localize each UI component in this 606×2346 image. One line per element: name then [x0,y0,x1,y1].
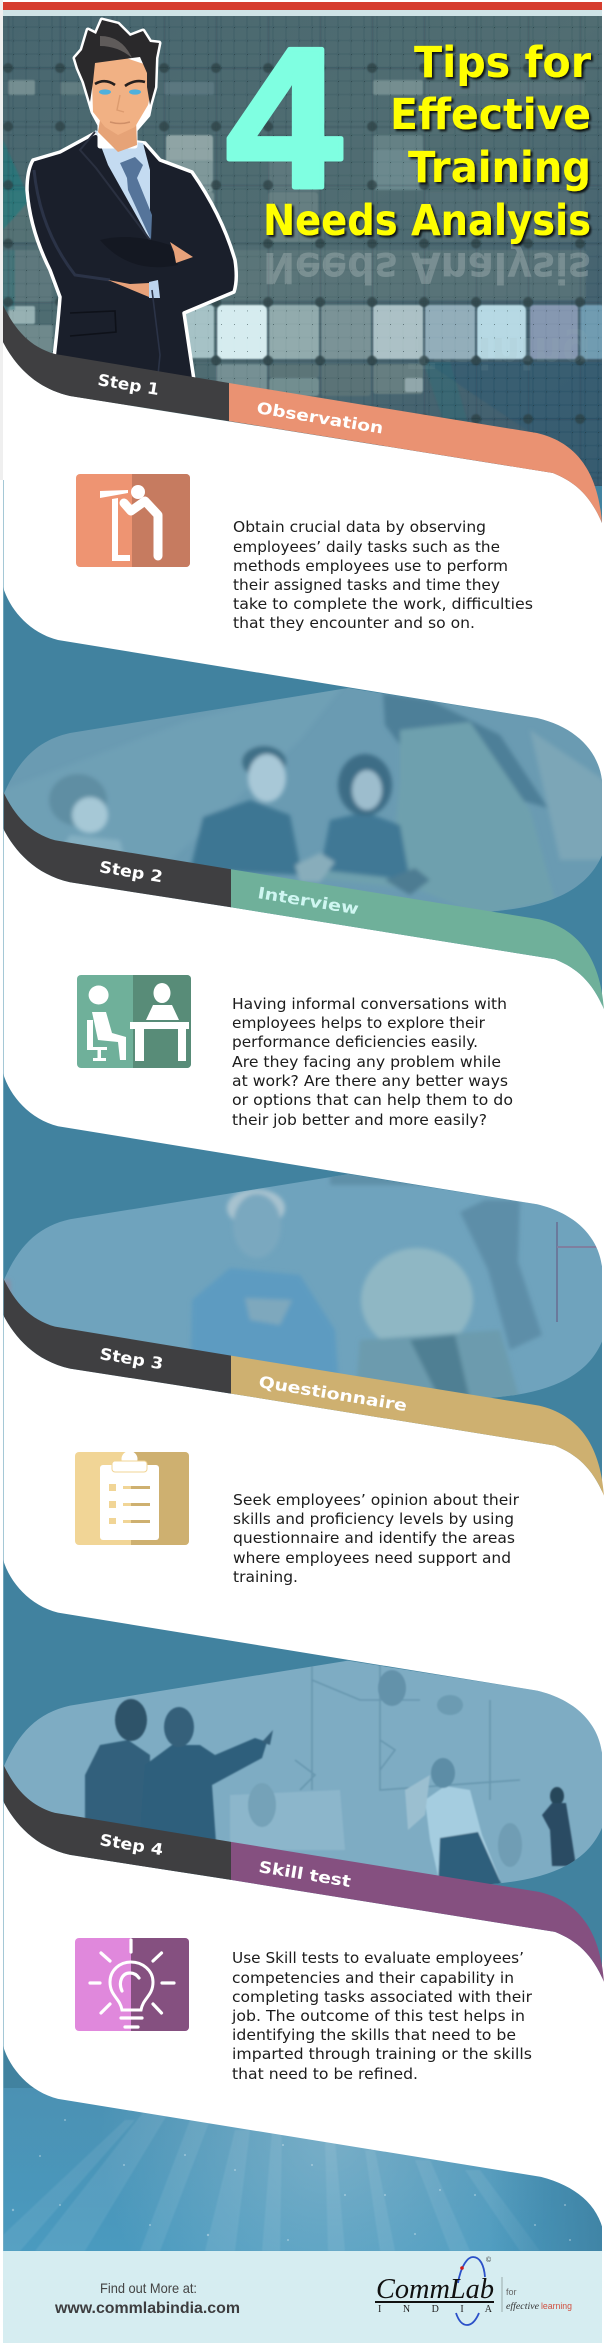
body text 1 [233,518,533,632]
CommLab logo: I N D I A [378,2304,493,2315]
interview label: Interview [256,883,360,918]
body text 1: their assigned tasks and time they [233,576,500,594]
white content shape 4 [3,1801,604,2234]
section: step 3 [3,1278,604,1763]
body text 4: job. The outcome of this test helps in [231,2007,525,2025]
step 4 label: Step 4 [98,1830,165,1859]
title: Training [408,143,591,193]
CommLab logo: learning [541,2301,572,2311]
icon: telescope observer [76,474,190,567]
coloured title band 4 [231,1842,604,1982]
body text 4: imparted through training or the skills [232,2045,532,2063]
photo panel: step 4 puzzle team [3,1655,604,1900]
title: Effective [390,90,591,140]
CommLab logo: © [486,2256,492,2264]
section: step 1 [3,305,604,790]
header background mosaic [3,16,604,486]
dark step band 3 [3,1278,231,1394]
businessman illustration [27,20,236,400]
dark step band 1 [3,305,229,421]
left page margin strip [0,0,3,480]
title: Tips for [414,38,592,88]
icon: interview desk [77,975,191,1068]
CommLab logo: for [506,2287,517,2297]
step 3 label: Step 3 [98,1344,165,1373]
CommLab logo: CommLab [376,2273,494,2305]
body text 1: employees’ daily tasks such as the [233,538,500,556]
body text 3: training. [233,1568,298,1586]
body text 3 [233,1491,520,1586]
coloured title band 1 [229,383,602,523]
body text 2: their job better and more easily? [232,1111,487,1129]
body text 3: where employees need support and [233,1549,511,1567]
body text 4: Use Skill tests to evaluate employees’ [232,1949,524,1967]
icon: light bulb [75,1938,189,2031]
coloured title band 2 [231,869,604,1009]
section: step 4 [3,1764,604,2234]
find out more text: Find out More at: [100,2280,197,2296]
body text 4: competencies and their capability in [232,1969,514,1987]
icon: clipboard checklist [75,1451,189,1545]
coloured title band 3 [231,1356,604,1496]
photo panel: step 2 handshake meeting [3,680,604,920]
white content shape 2 [3,828,604,1276]
body text 1: that they encounter and so on. [233,614,475,632]
body text 4 [231,1949,533,2083]
body text 2: employees helps to explore their [232,1014,486,1032]
white content shape 1 [3,342,604,790]
CommLab logo: effective [506,2301,539,2312]
step 2 label: Step 2 [98,857,164,886]
body text 1: Obtain crucial data by observing [233,518,486,536]
top red bar [3,2,602,10]
body text 1: take to complete the work, difficulties [233,595,533,613]
dark step band 4 [3,1764,231,1880]
body text 3: questionnaire and identify the areas [233,1529,515,1547]
body text 2: Are they facing any problem while [232,1053,501,1071]
questionnaire label: Questionnaire [257,1372,409,1415]
step 1 label: Step 1 [96,370,161,399]
CommLab logo [375,2256,572,2325]
white content shape 3 [3,1315,604,1763]
thin left edge line [3,480,4,2251]
section: step 2 [3,791,604,1276]
page blue background [3,480,602,2251]
title reflection: Training [408,327,591,377]
photo panel: step 3 classroom [3,1170,604,1410]
dark step band 2 [3,791,231,907]
body text 2: performance deficiencies easily. [232,1033,478,1051]
body text 3: Seek employees’ opinion about their [233,1491,520,1509]
body text 3: skills and proficiency levels by using [233,1510,514,1528]
body text 2 [232,995,513,1129]
skill test label: Skill test [257,1857,353,1891]
body text 4: that need to be refined. [232,2065,418,2083]
big number four: 4 [226,7,342,230]
body text 2: Having informal conversations with [232,995,507,1013]
pale bar under top bar [3,10,602,16]
body text 2: or options that can help them to do [232,1091,513,1109]
footer [3,2251,602,2343]
body text 4: completing tasks associated with their [232,1988,533,2006]
bottom light rays [4,2112,602,2251]
title [263,38,592,246]
title reflection [263,242,591,377]
observation label: Observation [255,398,385,438]
body text 1: methods employees use to perform [233,557,508,575]
bottom ray gradient background [3,2088,602,2251]
body text 4: identifying the skills that need to be [232,2026,516,2044]
body text 2: at work? Are there any better ways [232,1072,508,1090]
website url: www.commlabindia.com [54,2300,240,2317]
